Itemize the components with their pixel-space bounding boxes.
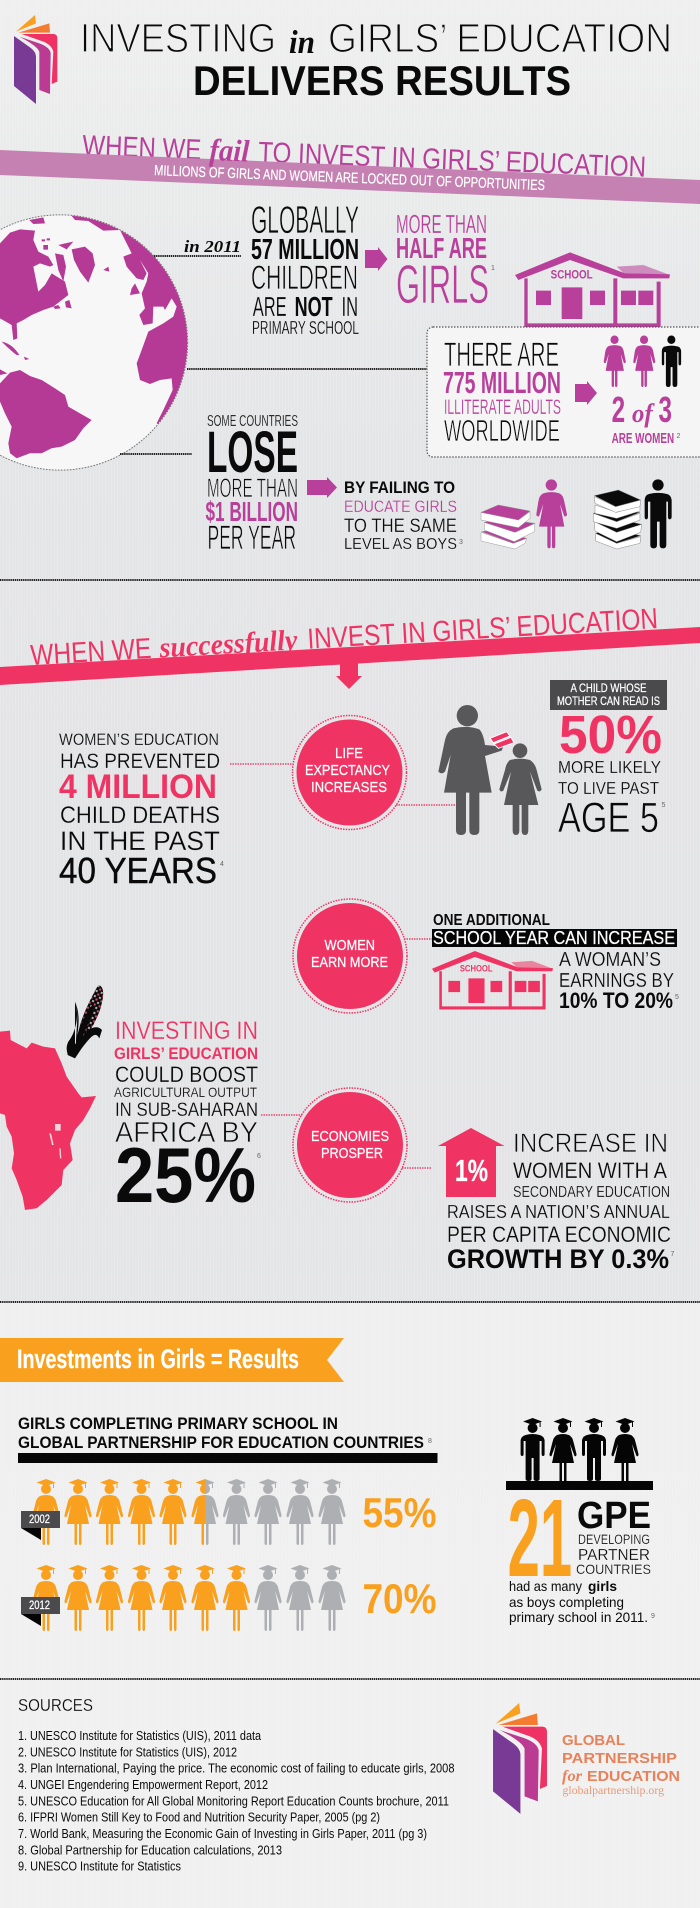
arrow — [307, 477, 337, 498]
year tag 2012 — [21, 1597, 60, 1626]
year tag 2012: 2012 — [29, 1600, 50, 1612]
icon: mother and child with book — [438, 705, 542, 835]
source list: 5. UNESCO Education for All Global Monitoring Report Education Counts brochure, 2011 — [18, 1794, 449, 1808]
banner: investments in girls = results: Investments in Girls = Results — [17, 1344, 299, 1374]
wordmark: PARTNERSHIP — [562, 1750, 677, 1767]
text block: one additional school year — [432, 912, 679, 1013]
chart heading: girls completing primary school: GIRLS COMPLETING PRIMARY SCHOOL IN — [18, 1414, 338, 1433]
source list: 7. World Bank, Measuring the Economic Gain of Investing in Girls Paper, 2011 (pg 3) — [18, 1827, 427, 1841]
icon: school — [515, 252, 670, 327]
circle: life expectancy increases: EXPECTANCY — [305, 762, 390, 779]
stat: 50% more likely to live past age 5: 50% — [559, 705, 662, 765]
stat: 2 of 3 are women: 2 — [676, 433, 680, 440]
stat: 21 GPE countries: had as many — [509, 1578, 582, 1594]
stat: 21 GPE countries: as boys completing — [509, 1594, 624, 1610]
icon: two women and one man — [604, 336, 681, 387]
stat: 50% more likely to live past age 5: MORE LIKELY — [558, 757, 661, 777]
circle: economies prosper: ECONOMIES — [311, 1128, 389, 1145]
stat: 21 GPE countries: primary school in 2011. — [509, 1609, 648, 1625]
text block: one additional school year: EARNINGS BY — [559, 970, 674, 992]
text block: investing in girls' education could boost output: AFRICA BY — [115, 1117, 258, 1149]
text block: women's education prevented 4 million deaths: 4 — [220, 861, 224, 868]
stat: 2 of 3 are women — [612, 389, 680, 447]
circle: life expectancy increases — [292, 716, 406, 830]
text block: women's education prevented 4 million deaths: CHILD DEATHS — [60, 802, 220, 829]
icon: books and man — [593, 479, 672, 549]
stat: 2 of 3 are women: 3 — [658, 389, 672, 430]
source list: 6. IFPRI Women Still Key to Food and Nutrition Security Paper, 2005 (pg 2) — [18, 1811, 380, 1825]
text block: by failing to educate girls: 3 — [459, 539, 463, 546]
text block: women's education prevented 4 million deaths: IN THE PAST — [60, 826, 220, 856]
value 70%: 70% — [362, 1575, 436, 1622]
text block: globally 57 million: PRIMARY SCHOOL — [252, 318, 359, 338]
arrow: up with 1% — [438, 1128, 504, 1197]
stat: 50% more likely to live past age 5: 5 — [662, 802, 666, 809]
illiteracy text: ILLITERATE ADULTS — [444, 396, 561, 419]
year tag 2002 — [21, 1511, 60, 1540]
text block: more than half are girls — [396, 209, 495, 315]
illiteracy text: 775 MILLION — [443, 366, 561, 400]
text block: women's education prevented 4 million deaths: 40 YEARS — [59, 850, 217, 891]
circle: women earn more — [293, 899, 407, 1013]
text block: by failing to educate girls: TO THE SAME — [344, 515, 457, 537]
text block: some countries lose: SOME COUNTRIES — [207, 413, 298, 430]
section heading: when we fail: MILLIONS OF GIRLS AND WOMEN ARE LOCKED OUT OF OPPORTUNITIES — [154, 163, 545, 194]
pictogram: 2002, 55 percent — [21, 1479, 436, 1545]
stat: 21 GPE countries: 21 — [508, 1477, 572, 1600]
icon: school: SCHOOL — [551, 267, 593, 281]
illiteracy text — [443, 336, 561, 448]
section heading: when we successfully — [0, 603, 700, 689]
stat: 50% more likely to live past age 5: TO LIVE PAST — [558, 778, 659, 798]
text block: investing in girls' education could boost output: IN SUB-SAHARAN — [115, 1099, 258, 1121]
callout: child whose mother can read — [550, 680, 667, 710]
title: GIRLS’ EDUCATION — [328, 15, 672, 61]
source list: 3. Plan International, Paying the price. The economic cost of failing to educate girls, 2008 — [18, 1762, 455, 1776]
text block: increase in women with secondary education: INCREASE IN — [513, 1128, 668, 1158]
arrow: to more than half are girls — [365, 247, 388, 271]
text block: more than half are girls: MORE THAN — [396, 209, 487, 239]
text block: one additional school year: 10% TO 20% — [559, 988, 673, 1013]
section heading: when we fail — [0, 130, 700, 204]
circle: life expectancy increases: INCREASES — [311, 779, 387, 796]
text block: one additional school year: ONE ADDITIONAL — [433, 912, 550, 929]
text block: more than half are girls: GIRLS — [396, 253, 489, 315]
map: africa — [0, 1031, 96, 1210]
wordmark: EDUCATION — [587, 1768, 680, 1785]
circle: economies prosper: PROSPER — [321, 1145, 383, 1162]
title — [80, 15, 672, 104]
text block: by failing to educate girls — [344, 478, 463, 553]
text block: investing in girls' education could boost output: INVESTING IN — [115, 1017, 258, 1045]
text block: increase in women with secondary education: GROWTH BY 0.3% — [447, 1244, 669, 1274]
text block: globally 57 million: IN — [342, 291, 358, 322]
banner: investments in girls = results — [0, 1338, 344, 1382]
stat: 50% more likely to live past age 5: AGE 5 — [558, 794, 659, 842]
icon: corn — [67, 985, 103, 1058]
logo: open book — [14, 15, 57, 104]
stat: 50% more likely to live past age 5 — [558, 705, 666, 842]
stat: 21 GPE countries: DEVELOPING — [578, 1532, 650, 1547]
text block: globally 57 million: GLOBALLY — [251, 199, 359, 242]
text block: increase in women with secondary education: WOMEN WITH A — [513, 1158, 667, 1183]
logo: global partnership for education — [493, 1703, 680, 1814]
illiteracy text: WORLDWIDE — [444, 414, 560, 448]
text block: globally 57 million: NOT — [295, 291, 333, 322]
arrow: up with 1%: 1% — [455, 1153, 488, 1188]
stat: 21 GPE countries: PARTNER — [578, 1547, 650, 1564]
stat: 21 GPE countries: GPE — [577, 1495, 651, 1537]
text block: some countries lose: $1 BILLION — [206, 496, 298, 527]
text block: one additional school year: A WOMAN’S — [559, 949, 661, 971]
text block: by failing to educate girls: LEVEL AS BOYS — [344, 536, 457, 553]
title: DELIVERS RESULTS — [193, 57, 571, 104]
chart heading: girls completing primary school: 8 — [428, 1438, 432, 1445]
sources — [18, 1695, 455, 1874]
arrow — [575, 381, 597, 405]
text block: one additional school year: SCHOOL YEAR CAN INCREASE — [433, 928, 675, 948]
text block: increase in women with secondary education — [447, 1128, 674, 1274]
sources: SOURCES — [18, 1695, 93, 1715]
text block: globally 57 million: CHILDREN — [251, 259, 358, 297]
header — [14, 15, 672, 104]
text block: more than half are girls: HALF ARE — [396, 233, 487, 265]
wordmark: GLOBAL — [562, 1732, 625, 1749]
wordmark — [562, 1732, 680, 1797]
text block: increase in women with secondary education: RAISES A NATION’S ANNUAL — [447, 1202, 670, 1222]
callout: child whose mother can read: A CHILD WHOSE — [570, 681, 646, 695]
wordmark: globalpartnership.org — [562, 1785, 664, 1797]
panel: 775 million illiterate adults — [427, 327, 700, 457]
stat: 21 GPE countries: girls — [588, 1578, 617, 1594]
stat: 21 GPE countries: COUNTRIES — [576, 1561, 651, 1577]
text block: one additional school year: 5 — [675, 994, 679, 1001]
connector lines from globe — [120, 256, 428, 454]
title: INVESTING — [80, 15, 276, 61]
text block: investing in girls' education could boost output: 6 — [257, 1153, 261, 1160]
text block: globally 57 million: 57 MILLION — [251, 234, 359, 266]
text block: increase in women with secondary education: PER CAPITA ECONOMIC — [447, 1222, 671, 1247]
text block: women's education prevented 4 million deaths: WOMEN’S EDUCATION — [59, 731, 219, 749]
text block: some countries lose: MORE THAN — [207, 473, 298, 503]
text block: some countries lose: LOSE — [207, 420, 298, 485]
circle: economies prosper — [293, 1088, 407, 1202]
text block: by failing to educate girls: BY FAILING TO — [344, 478, 455, 497]
icon: pink school — [432, 951, 553, 1010]
value 55%: 55% — [362, 1489, 436, 1536]
source list: 1. UNESCO Institute for Statistics (UIS), 2011 data — [18, 1729, 261, 1743]
year tag 2002: 2002 — [29, 1514, 50, 1526]
section heading: when we successfully: successfully — [158, 624, 298, 664]
icon: pink school: SCHOOL — [460, 963, 493, 973]
stat: 2 of 3 are women: 2 — [612, 389, 625, 430]
text block: women's education prevented 4 million deaths — [59, 731, 224, 891]
source list: 9. UNESCO Institute for Statistics — [18, 1860, 181, 1874]
text block: globally 57 million: ARE — [253, 291, 287, 322]
section heading: when we successfully: WHEN WE — [30, 633, 152, 672]
source list: 8. Global Partnership for Education calculations, 2013 — [18, 1843, 282, 1857]
callout: child whose mother can read: MOTHER CAN READ IS — [557, 694, 660, 708]
chart heading: girls completing primary school: GLOBAL PARTNERSHIP FOR EDUCATION COUNTRIES — [18, 1433, 424, 1452]
text block: globally 57 million: in 2011 — [184, 237, 241, 256]
text block: investing in girls' education could boost output: GIRLS’ EDUCATION — [114, 1044, 258, 1063]
source list: 4. UNGEI Engendering Empowerment Report, 2012 — [18, 1778, 268, 1792]
section heading: when we fail: WHEN WE — [82, 130, 202, 167]
icon: graduates on platform — [506, 1418, 653, 1490]
globe — [0, 214, 188, 471]
source list: 2. UNESCO Institute for Statistics (UIS), 2012 — [18, 1745, 237, 1759]
text block: investing in girls' education could boost output: AGRICULTURAL OUTPUT — [114, 1084, 257, 1100]
text block: investing in girls' education could boost output — [114, 1017, 261, 1219]
circle: life expectancy increases: LIFE — [335, 745, 363, 762]
circle: women earn more: EARN MORE — [311, 954, 388, 971]
text block: investing in girls' education could boost output: 25% — [115, 1131, 256, 1219]
section heading: when we fail: fail — [209, 132, 250, 169]
text block: globally 57 million — [184, 199, 359, 338]
text block: some countries lose — [206, 413, 298, 557]
pictogram: 2012, 70 percent — [21, 1565, 436, 1631]
stat: 2 of 3 are women: of — [632, 399, 655, 428]
text block: women's education prevented 4 million deaths: HAS PREVENTED — [60, 750, 220, 773]
icon: books and woman — [481, 479, 567, 549]
stat: 21 GPE countries — [508, 1477, 655, 1625]
wordmark: for — [562, 1768, 583, 1785]
illiteracy text: THERE ARE — [444, 336, 559, 374]
circle: women earn more: WOMEN — [324, 937, 375, 954]
text block: investing in girls' education could boost output: COULD BOOST — [115, 1062, 258, 1087]
title: in — [289, 25, 315, 61]
source list — [18, 1729, 455, 1874]
text block: increase in women with secondary education: 7 — [670, 1251, 674, 1258]
text block: by failing to educate girls: EDUCATE GIRLS — [344, 497, 457, 516]
text block: some countries lose: PER YEAR — [208, 519, 296, 557]
arrow: down — [336, 660, 362, 689]
text block: women's education prevented 4 million deaths: 4 MILLION — [59, 768, 217, 806]
text block: more than half are girls: 1 — [491, 265, 495, 272]
stat: 21 GPE countries: 9 — [651, 1613, 655, 1620]
chart heading: girls completing primary school — [18, 1414, 438, 1463]
